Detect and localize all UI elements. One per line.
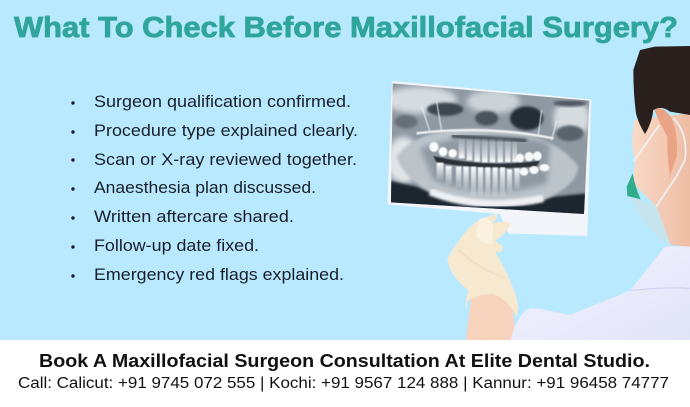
x-ray sheet (383, 81, 591, 236)
item: emergency red flags: Emergency red flags explained. (94, 266, 344, 284)
item: scan or x-ray: Scan or X-ray reviewed together. (94, 151, 357, 169)
photo: surgeon holding dental x-ray (383, 46, 690, 340)
gloved hand (447, 214, 518, 317)
item: follow-up date: Follow-up date fixed. (94, 237, 259, 255)
footer band (0, 340, 690, 407)
checklist (71, 93, 358, 284)
hair (633, 46, 690, 134)
surgical mask (627, 118, 686, 246)
skull bone haze (383, 87, 457, 113)
lab coat (511, 246, 690, 340)
item: written aftercare: Written aftercare shared. (94, 208, 294, 226)
occlusal gap (433, 156, 540, 168)
neck and face (632, 113, 690, 247)
contact numbers: Call: Calicut: +91 9745 072 555 | Kochi: +91 9567 124 888 | Kannur: +91 96458 74777 (18, 375, 669, 392)
teeth (429, 138, 549, 197)
item: procedure type: Procedure type explained clearly. (94, 122, 358, 140)
item: surgeon qualification: Surgeon qualification confirmed. (94, 93, 351, 111)
lower dark band (387, 180, 587, 217)
arm (466, 293, 516, 340)
item: anaesthesia plan: Anaesthesia plan discussed. (94, 179, 316, 197)
ear (654, 108, 677, 176)
jaw (397, 129, 578, 205)
call to action: Book A Maxillofacial Surgeon Consultation At Elite Dental Studio. (39, 350, 650, 371)
title: What To Check Before Maxillofacial Surgery? (14, 12, 678, 44)
sinus shadows (427, 103, 463, 116)
